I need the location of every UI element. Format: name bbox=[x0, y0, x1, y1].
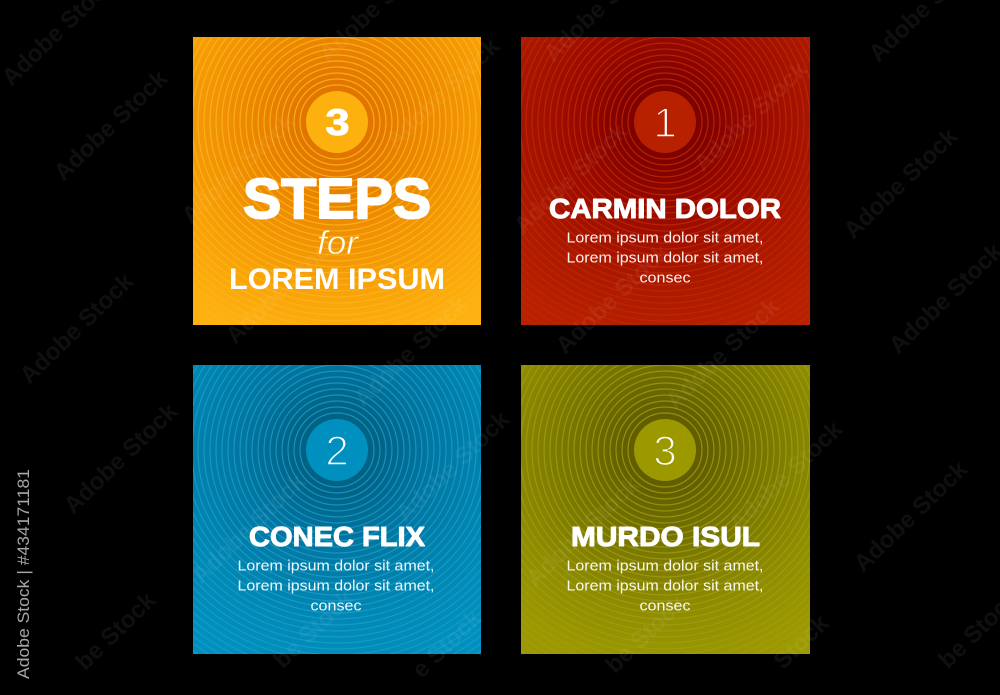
watermarks: adobe stock: Adobe Stock bbox=[689, 55, 813, 177]
watermarks: adobe stock: be Stock bbox=[268, 584, 360, 674]
text: description: Lorem ipsum dolor sit amet, bbox=[566, 578, 764, 594]
text: description bbox=[566, 230, 764, 286]
text: description: Lorem ipsum dolor sit amet, bbox=[238, 558, 434, 574]
watermarks: adobe stock: Adobe Stock bbox=[661, 292, 785, 414]
stock id label: Adobe Stock | #434171181 bbox=[14, 469, 33, 679]
watermarks: adobe stock: Adobe Stock bbox=[849, 455, 973, 577]
heading: carmin dolor: CARMIN DOLOR bbox=[549, 193, 781, 224]
watermarks: adobe stock: Adobe Stock bbox=[59, 397, 183, 519]
panel: intro title bbox=[193, 37, 481, 325]
watermarks: adobe stock: Adobe Stock bbox=[221, 227, 345, 349]
panel: step 2 conec flix bbox=[193, 365, 481, 654]
heading: lorem ipsum: LOREM IPSUM bbox=[229, 263, 445, 296]
icon: number 3 badge bbox=[306, 91, 368, 153]
icon: number 1 badge: 1 bbox=[653, 99, 677, 146]
watermarks: adobe stock: Adobe Stock bbox=[187, 467, 311, 589]
text: description: consec bbox=[640, 598, 691, 614]
watermarks: adobe stock: Adobe Stock bbox=[521, 470, 645, 592]
watermarks: adobe stock: Adobe Stock bbox=[15, 267, 139, 389]
watermarks: adobe stock: Adobe Stock bbox=[381, 32, 505, 154]
heading: steps: STEPS bbox=[243, 167, 431, 231]
text: description: Lorem ipsum dolor sit amet, bbox=[566, 250, 764, 266]
text: description: consec bbox=[640, 270, 691, 286]
icon: number 2 badge bbox=[306, 419, 368, 481]
text: description: Lorem ipsum dolor sit amet, bbox=[566, 558, 764, 574]
text: description: consec bbox=[310, 598, 362, 614]
text: description: Lorem ipsum dolor sit amet, bbox=[566, 230, 764, 246]
text: description: Lorem ipsum dolor sit amet, bbox=[238, 578, 434, 594]
watermarks: adobe stock: Stock bbox=[768, 609, 835, 675]
icon: number 1 badge bbox=[634, 91, 696, 153]
panel: step 3 murdo isul bbox=[521, 365, 810, 654]
icon: number 3 badge bbox=[634, 419, 696, 481]
panel: step 1 carmin dolor bbox=[521, 37, 810, 325]
icon: number 2 badge: 2 bbox=[325, 427, 349, 474]
heading: murdo isul: MURDO ISUL bbox=[571, 521, 760, 552]
subheading: for: for bbox=[317, 224, 360, 261]
text: description bbox=[238, 558, 434, 614]
icon: number 3 badge: 3 bbox=[326, 102, 350, 143]
text: description bbox=[566, 558, 764, 614]
watermarks: adobe stock: be Stock bbox=[70, 586, 162, 676]
watermarks: adobe stock: Adobe Stock bbox=[724, 415, 848, 537]
watermarks: adobe stock: Adobe Stock bbox=[509, 117, 633, 239]
watermarks: adobe stock: Adobe Stock bbox=[349, 290, 473, 412]
watermarks: adobe stock: be Stock bbox=[600, 589, 692, 679]
icon: number 3 badge: 3 bbox=[653, 427, 677, 474]
watermarks: adobe stock: Adobe Stock bbox=[177, 107, 301, 229]
heading: conec flix: CONEC FLIX bbox=[249, 521, 425, 552]
watermarks: adobe stock: Adobe Stock bbox=[49, 64, 173, 186]
watermarks: adobe stock: Adobe Stock bbox=[391, 405, 515, 527]
watermarks: adobe stock: e Stock bbox=[407, 604, 488, 684]
watermarks: adobe stock: Adobe Stock bbox=[839, 122, 963, 244]
watermarks: adobe stock: Adobe Stock bbox=[551, 237, 675, 359]
